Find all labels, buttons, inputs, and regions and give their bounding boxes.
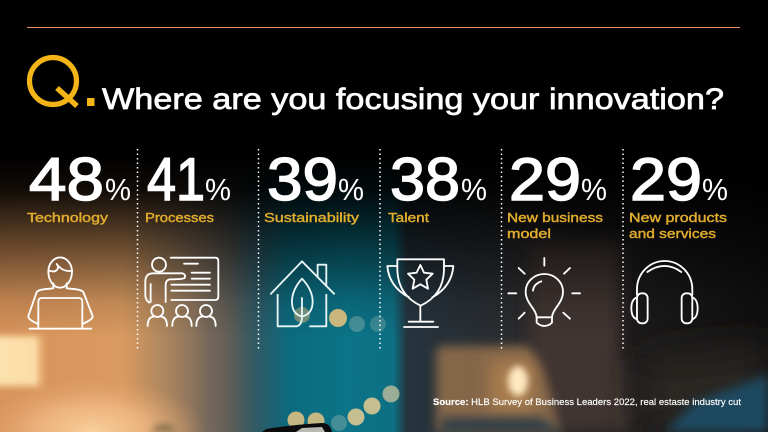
stat: 48%: [29, 146, 131, 213]
panel: sustainability: [264, 146, 364, 326]
label: new business model: New business: [507, 210, 604, 225]
stat: 38%: 38: [390, 146, 460, 213]
icon: trophy with star: [387, 259, 453, 327]
stat: 29%: %: [702, 172, 728, 207]
title: Where are you focusing your innovation?: [102, 83, 724, 116]
stat: 48%: 48: [29, 146, 104, 213]
stat: 38%: [390, 146, 487, 213]
logo: Q mark: [30, 58, 94, 106]
stat: 29%: [630, 146, 728, 213]
label: technology: Technology: [27, 210, 109, 225]
stat: 38%: %: [461, 172, 487, 207]
label: new products and services: and services: [629, 226, 717, 241]
stat: 39%: [267, 146, 364, 213]
phone held at bottom: [262, 423, 332, 432]
label: sustainability: Sustainability: [264, 210, 360, 225]
panel: talent: [387, 146, 487, 327]
label: talent: Talent: [388, 210, 429, 225]
top rule: [27, 27, 740, 28]
panel: new products and services: [629, 146, 728, 323]
bokeh lights: [288, 307, 400, 431]
stat: 39%: 39: [267, 146, 338, 213]
panel: technology: [27, 146, 131, 329]
label: new business model: [507, 210, 604, 241]
stat: 41%: 41: [147, 146, 205, 213]
label: processes: Processes: [145, 210, 215, 225]
stat: 29%: 29: [509, 146, 581, 213]
icon: presenter and audience: [145, 258, 218, 326]
label: new products and services: New products: [629, 210, 728, 225]
panel: processes: [145, 146, 231, 326]
dotted column dividers: [138, 149, 623, 349]
icon: person at laptop: [28, 257, 93, 329]
stat: 41%: %: [205, 172, 231, 207]
label: new business model: model: [507, 226, 551, 241]
stat: 29%: 29: [630, 146, 702, 213]
stat: 48%: %: [105, 172, 131, 207]
icon: light bulb: [508, 258, 580, 326]
source note: Source: HLB Survey of Business Leaders 2022, real estaste industry cut: [433, 397, 741, 407]
stat: 39%: %: [338, 172, 364, 207]
label: new products and services: [629, 210, 728, 241]
icon: house with leaf: [270, 261, 335, 326]
stat: 29%: %: [581, 172, 607, 207]
panel: new business model: [507, 146, 607, 326]
icon: headphones: [631, 261, 698, 323]
stat: 29%: [509, 146, 607, 213]
